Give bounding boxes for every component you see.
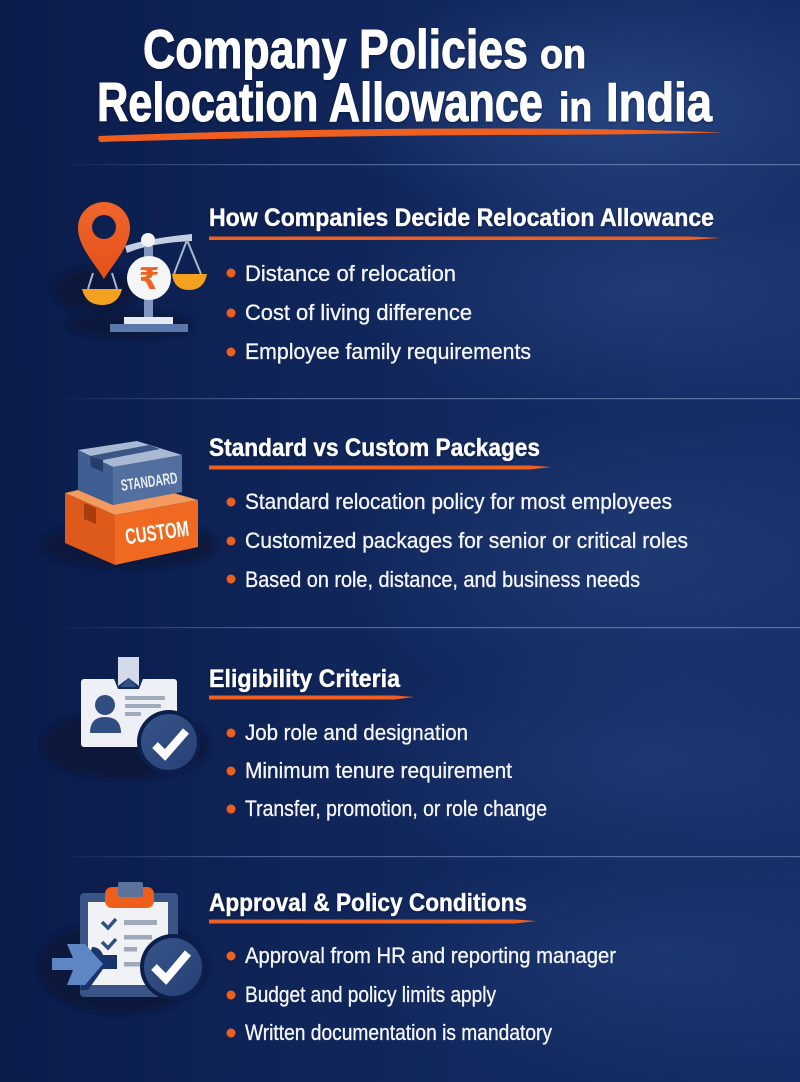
bullet list: Transfer, promotion, or role change — [245, 796, 547, 821]
icon: stacked boxes: STANDARD — [120, 470, 179, 495]
bullet list — [226, 489, 688, 592]
icon: location pin and scale — [53, 202, 207, 338]
heading: Approval & Policy Conditions — [209, 889, 527, 917]
bullet list: Job role and designation — [245, 720, 468, 745]
bullet list: Customized packages for senior or critical roles — [245, 528, 688, 553]
divider 1 — [50, 164, 800, 165]
heading underline — [209, 236, 721, 240]
title: Relocation Allowance — [97, 71, 543, 133]
panel: standard vs custom — [42, 434, 688, 592]
heading: Eligibility Criteria — [209, 665, 401, 693]
icon: stacked boxes — [42, 441, 218, 569]
bullet list: Cost of living difference — [245, 300, 472, 325]
heading underline — [209, 920, 536, 924]
divider 3 — [50, 627, 800, 628]
title: on — [540, 31, 586, 77]
panel: how companies decide — [53, 202, 721, 364]
bullet list: Minimum tenure requirement — [245, 758, 512, 783]
bullet list: Approval from HR and reporting manager — [245, 943, 616, 968]
heading underline — [209, 466, 551, 470]
bullet list — [226, 943, 616, 1045]
bullet list: Based on role, distance, and business needs — [245, 567, 640, 592]
bullet list: Distance of relocation — [245, 261, 456, 286]
title: in — [559, 84, 592, 130]
divider 4 — [50, 856, 800, 857]
bullet list: Budget and policy limits apply — [245, 982, 496, 1007]
heading: Standard vs Custom Packages — [209, 434, 540, 462]
title — [97, 18, 712, 133]
bullet list — [226, 261, 531, 364]
heading underline — [209, 696, 414, 700]
divider 2 — [50, 398, 800, 399]
panel: eligibility — [41, 657, 547, 821]
panel: approval — [38, 882, 616, 1045]
icon: location pin and scale: ₹ — [139, 262, 159, 297]
title: India — [606, 71, 712, 133]
bullet list — [226, 720, 547, 821]
heading: How Companies Decide Relocation Allowance — [209, 204, 714, 232]
bullet list: Standard relocation policy for most employees — [245, 489, 672, 514]
title: Company Policies — [143, 18, 528, 80]
bullet list: Written documentation is mandatory — [245, 1020, 552, 1045]
icon: id card with check — [41, 657, 209, 779]
icon: clipboard with arrow and check — [38, 882, 206, 1013]
title underline — [98, 128, 724, 142]
icon: stacked boxes: CUSTOM — [124, 516, 190, 549]
bullet list: Employee family requirements — [245, 339, 531, 364]
